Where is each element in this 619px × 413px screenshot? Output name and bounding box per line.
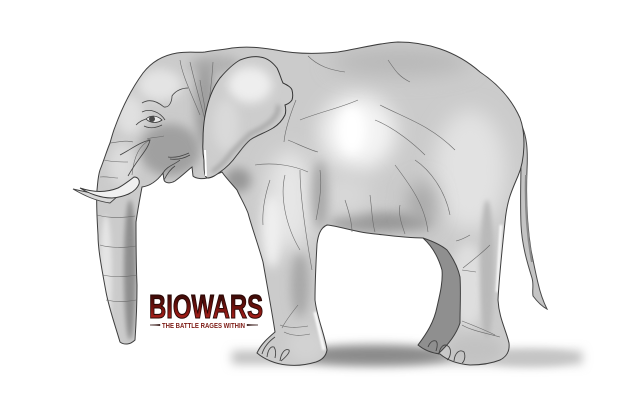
logo <box>149 288 263 330</box>
tail <box>520 122 547 309</box>
ground shadow <box>232 345 582 365</box>
wrinkles <box>97 56 500 337</box>
mouth <box>120 140 190 180</box>
far hind leg <box>418 238 460 354</box>
elephant body <box>96 42 524 366</box>
toenails <box>262 337 465 363</box>
near hind leg inner edge <box>423 238 460 354</box>
logo tagline: THE BATTLE RAGES WITHIN <box>162 321 245 330</box>
eye <box>136 88 188 128</box>
ear <box>203 57 293 178</box>
logo wordmark: BIOWARS <box>149 288 263 325</box>
body shading <box>100 48 506 364</box>
elephant illustration with logo <box>72 42 586 372</box>
tusk <box>73 177 139 203</box>
